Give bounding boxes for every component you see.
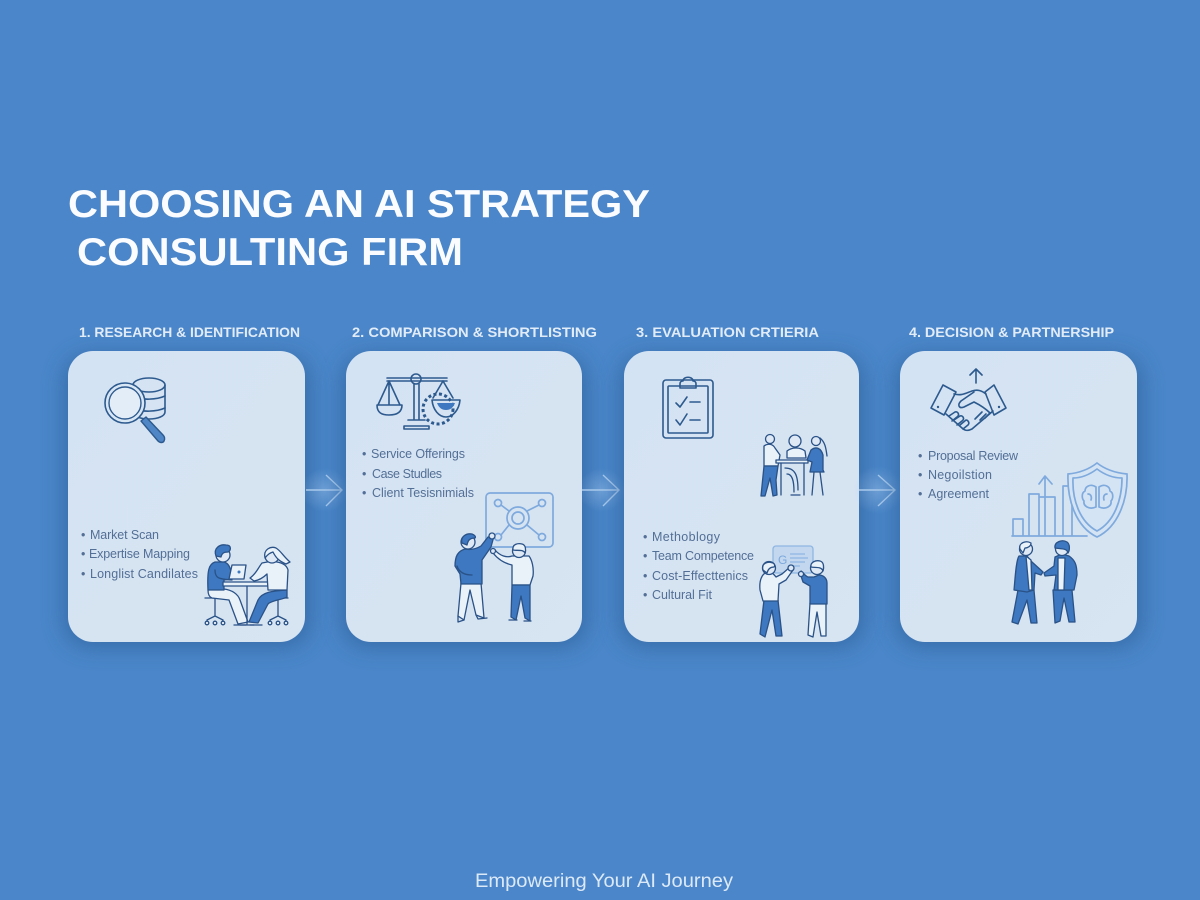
text: comparison bullets: • [362,486,366,500]
icon: brain shield [1068,463,1127,537]
illustration: document board [773,546,813,573]
heading: step 3: 3. EVALUATION CRTIERIA [636,324,819,340]
panel: step 4 decision [896,351,1142,647]
arrow: step 2 to 3 [578,468,626,512]
text: evaluation bullets: • [643,569,647,583]
text: evaluation bullets: • [643,530,647,544]
title: CHOOSING AN AI STRATEGY [68,183,650,226]
text: research bullets: • [81,547,85,561]
illustration: two people discussing [760,561,827,637]
arrow: step 3 to 4 [852,466,904,514]
illustration: two people shaking hands [1012,541,1077,624]
text: decision bullets: Proposal Review [928,449,1019,463]
illustration: two people at a table [205,545,290,625]
text: evaluation bullets: Team Competence [652,549,754,563]
text: comparison bullets: Service Offerings [371,447,465,461]
heading: step 4: 4. DECISION & PARTNERSHIP [909,324,1114,340]
heading: step 1: 1. RESEARCH & IDENTIFICATION [79,324,300,340]
text: decision bullets: • [918,487,922,501]
panel: step 1 research [64,351,310,647]
panel: step 2 comparison [342,351,587,647]
text: research bullets: Longlist Candilates [90,567,198,581]
tagline: Empowering Your AI Journey [475,871,734,892]
title: CONSULTING FIRM [77,231,463,274]
text: evaluation bullets: Methoblogy [652,530,721,544]
text: research bullets: Market Scan [90,528,159,542]
icon: clipboard checklist [663,377,713,438]
text: evaluation bullets: • [643,549,647,563]
illustration: document board: G [778,553,787,567]
text: evaluation bullets [643,530,754,602]
text: decision bullets [918,449,1019,501]
text: evaluation bullets: Cost-Effecttenics [652,569,748,583]
text: comparison bullets: • [362,467,366,481]
panel: step 3 evaluation [620,351,864,647]
arrow: step 1 to 2 [301,468,349,512]
illustration: team around a table [761,434,827,496]
text: decision bullets: • [918,449,922,463]
text: decision bullets: • [918,468,922,482]
text: comparison bullets: • [362,447,366,461]
illustration: two people at a board [455,533,533,622]
text: comparison bullets: Client Tesisnimials [372,486,474,500]
text: evaluation bullets: Cultural Fit [652,588,713,602]
text: research bullets: • [81,567,85,581]
text: decision bullets: Agreement [928,487,990,501]
text: evaluation bullets: • [643,588,647,602]
text: research bullets: • [81,528,85,542]
chart: rising bars [1012,476,1087,536]
illustration: network board [486,493,553,547]
text: decision bullets: Negoilstion [928,468,992,482]
title [68,183,650,274]
icon: handshake with up arrow [931,369,1006,430]
text: comparison bullets: Case Studles [372,467,442,481]
text: research bullets [81,528,198,581]
icon: scales and gear [377,374,460,429]
icon: magnifier and database [105,378,165,442]
heading: step 2: 2. COMPARISON & SHORTLISTING [352,324,597,340]
text: comparison bullets [362,447,474,500]
text: research bullets: Expertise Mapping [89,547,190,561]
